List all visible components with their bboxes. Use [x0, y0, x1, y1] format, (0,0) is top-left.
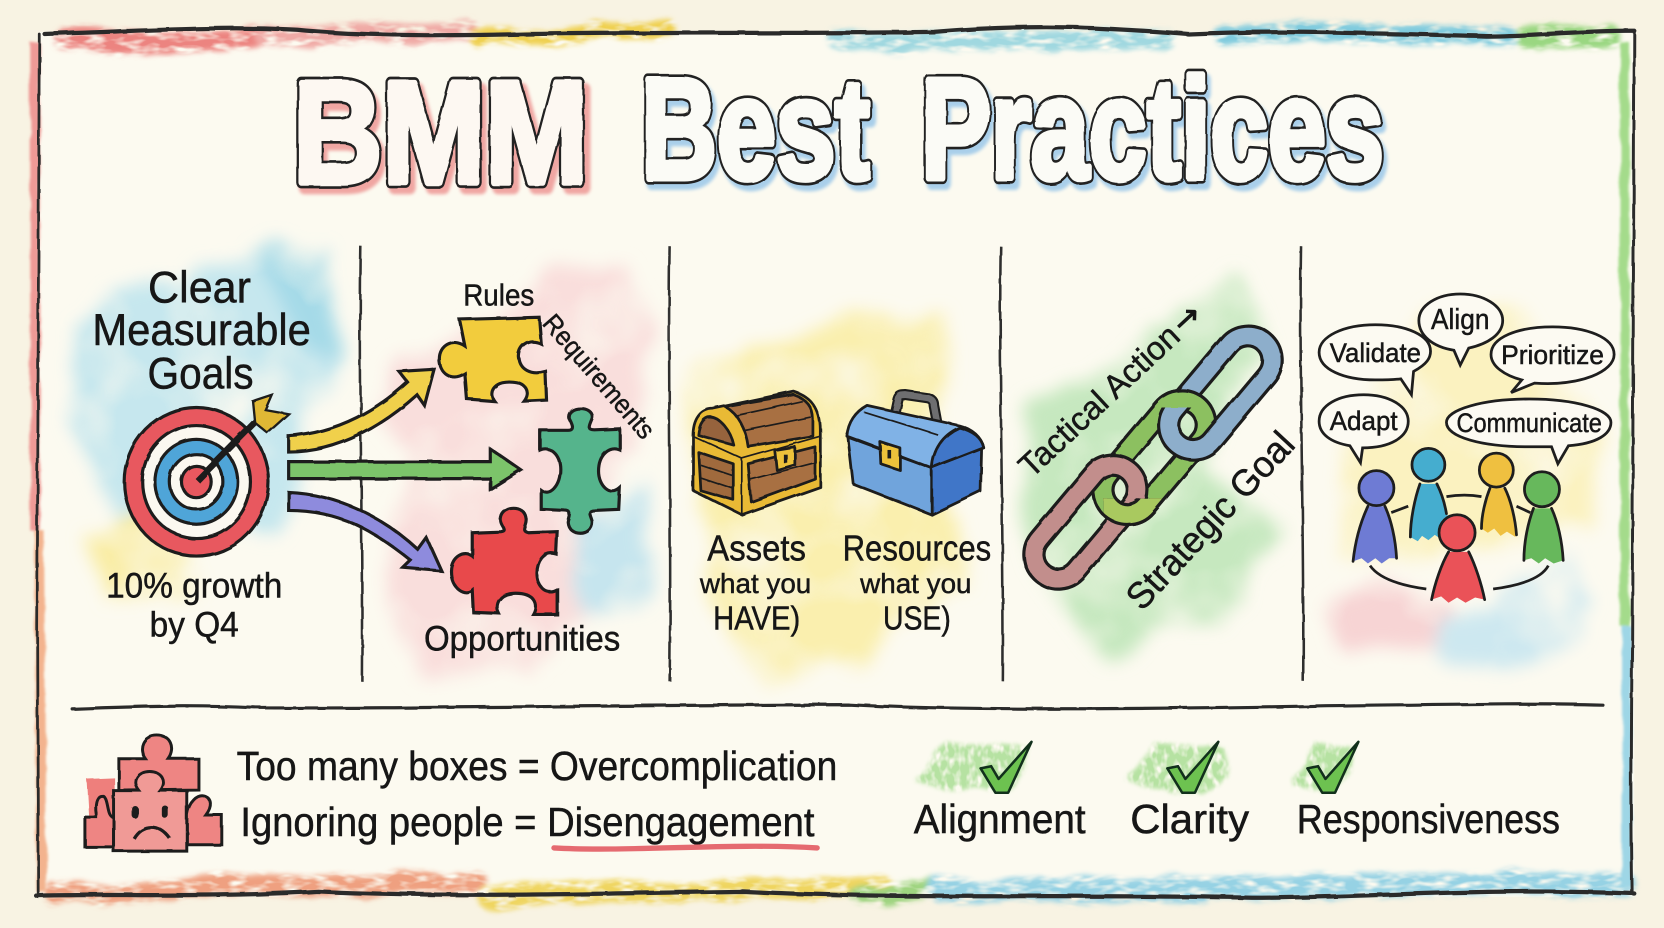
title shadow: Best blue: Best — [644, 55, 873, 215]
chain overlap: green over blue — [1152, 389, 1212, 408]
chest keyhole — [784, 454, 787, 463]
title word BMM: BMM — [293, 51, 588, 214]
title shadow: Practices blue: Practices — [924, 55, 1387, 215]
person teal — [1410, 448, 1448, 541]
toolbox lid — [847, 405, 984, 468]
green head — [1524, 472, 1559, 507]
icon: toolbox — [847, 395, 984, 515]
yellow body — [1481, 488, 1515, 537]
meeting table — [1370, 495, 1548, 589]
icon: treasure chest — [693, 392, 820, 515]
Clarity label: Clarity — [1130, 796, 1250, 842]
assets watercolour wash — [690, 313, 971, 684]
assets title: Assets — [707, 527, 806, 568]
sad eyes — [135, 809, 165, 815]
chest left panel — [698, 452, 733, 500]
people watercolour wash — [1321, 308, 1597, 669]
title — [293, 49, 1387, 219]
goals heading — [92, 263, 311, 398]
chain link red — [1024, 455, 1147, 589]
Responsiveness tick — [1307, 742, 1358, 793]
back left scrap — [87, 778, 115, 817]
title word Best fill: Best — [641, 49, 870, 209]
Communicate text: Communicate — [1457, 408, 1602, 438]
sad mouth — [134, 827, 170, 838]
title shadow: BMM red: BMM — [296, 59, 593, 219]
check: Clarity — [1125, 742, 1250, 842]
label: Tactical Action: Tactical Action — [1011, 317, 1187, 484]
panel: pitfalls and outcomes — [85, 735, 1560, 851]
bubble: Adapt — [1319, 395, 1408, 463]
blue body — [1353, 506, 1397, 564]
label: Rules: Rules — [463, 278, 534, 313]
pitfall line 2: Ignoring people = Disengagement — [240, 799, 814, 845]
resources caption — [843, 527, 991, 636]
resources note 2: USE) — [883, 599, 951, 636]
puzzle piece: rules yellow — [439, 317, 547, 401]
Align text: Align — [1431, 304, 1489, 336]
bubble: Prioritize — [1491, 327, 1614, 393]
red body — [1432, 552, 1485, 603]
goals example text — [106, 566, 282, 645]
assets caption — [699, 527, 811, 636]
teal head — [1412, 448, 1445, 481]
person red — [1432, 515, 1485, 603]
bubble: Validate — [1319, 325, 1431, 395]
blue head — [1359, 471, 1394, 506]
Communicate outline — [1446, 399, 1611, 464]
title word BMM fill: BMM — [293, 51, 588, 214]
Alignment label: Alignment — [914, 796, 1086, 842]
toolbox seam — [864, 412, 938, 435]
green body — [1524, 508, 1563, 564]
Validate text: Validate — [1330, 338, 1421, 368]
panel: puzzle pieces — [377, 255, 661, 674]
chain link green — [1093, 390, 1216, 524]
Clarity scribble — [1125, 743, 1226, 792]
person blue — [1353, 471, 1397, 564]
assets note 2: HAVE) — [713, 599, 800, 636]
pitfall line 1: Too many boxes = Overcomplication — [237, 743, 837, 789]
toolbox lid end — [932, 428, 984, 468]
puzzle piece: opportunities red — [451, 508, 557, 614]
blue outline — [1353, 506, 1397, 561]
right piece — [187, 796, 222, 845]
chest seams — [693, 401, 820, 515]
check: Responsiveness — [1293, 742, 1560, 842]
red outline — [1432, 552, 1485, 600]
icon: arrow up-right: → — [1163, 295, 1209, 341]
toolbox keyhole — [888, 450, 891, 458]
resources note 1: what you — [859, 568, 972, 599]
icon: sad puzzle pile — [85, 735, 222, 851]
arrow: yellow to rules — [289, 369, 434, 452]
person yellow — [1479, 453, 1516, 537]
chain overlap: green over red — [1103, 498, 1168, 526]
teal body — [1410, 484, 1448, 541]
Responsiveness label: Responsiveness — [1297, 796, 1560, 842]
back piece — [119, 735, 198, 791]
lower left piece — [85, 796, 114, 847]
icon: target with arrow — [124, 395, 289, 556]
chain watercolour wash — [1024, 276, 1289, 647]
chest lock — [775, 447, 795, 470]
chest lid wood — [725, 395, 813, 447]
green outline — [1524, 508, 1563, 560]
goals heading line 2: Measurable — [92, 306, 311, 355]
toolbox side — [932, 448, 982, 515]
chest gold body — [693, 392, 820, 515]
title word Practices fill: Practices — [921, 49, 1384, 209]
assets note 1: what you — [699, 568, 811, 599]
label: Strategic Goal: Strategic Goal — [1117, 423, 1303, 618]
chest front panel — [748, 447, 815, 502]
goals watercolour wash — [74, 249, 345, 600]
title word Practices: Practices — [921, 49, 1384, 209]
teal outline — [1410, 484, 1446, 537]
example line 1: 10% growth — [106, 566, 282, 605]
chain link blue — [1159, 326, 1282, 460]
title word Best: Best — [641, 49, 870, 209]
Adapt text: Adapt — [1330, 406, 1398, 436]
goals heading line 3: Goals — [148, 349, 254, 398]
icon: chain links — [1024, 326, 1282, 589]
Alignment tick — [981, 742, 1032, 793]
label: Opportunities: Opportunities — [424, 620, 620, 659]
arrow: green to requirements — [289, 449, 521, 489]
resources title: Resources — [843, 527, 991, 568]
Responsiveness scribble — [1293, 745, 1353, 792]
puzzle piece: requirements green — [540, 409, 620, 533]
Alignment scribble — [915, 743, 1027, 790]
toolbox handle inner — [895, 395, 937, 422]
label: Requirements: Requirements — [537, 308, 661, 445]
yellow outline — [1481, 488, 1516, 535]
front piece — [114, 772, 187, 851]
Align outline — [1419, 294, 1503, 365]
yellow head — [1479, 453, 1513, 487]
person green — [1524, 472, 1563, 564]
goals heading line 1: Clear — [148, 263, 251, 312]
check: Alignment — [914, 742, 1086, 842]
panel: communication — [1319, 294, 1614, 669]
arrow: purple to opportunities — [289, 492, 441, 571]
panel: goals — [74, 249, 345, 645]
Clarity tick — [1167, 742, 1218, 793]
panel dividers — [360, 246, 1303, 681]
red head — [1439, 515, 1475, 551]
puzzle watercolour wash — [377, 255, 649, 674]
Prioritize text: Prioritize — [1501, 340, 1604, 370]
red underline — [554, 846, 817, 849]
panel: chain — [1011, 276, 1303, 647]
bubble: Align — [1419, 294, 1503, 365]
Validate outline — [1319, 325, 1431, 395]
Adapt outline — [1319, 395, 1408, 463]
Prioritize outline — [1491, 327, 1614, 393]
panel: assets and resources — [690, 313, 991, 684]
toolbox handle — [895, 395, 937, 422]
toolbox front — [848, 437, 932, 515]
bubble: Communicate — [1446, 399, 1611, 464]
chest arch panel — [698, 417, 733, 445]
example line 2: by Q4 — [150, 606, 239, 645]
toolbox lock — [880, 441, 900, 470]
